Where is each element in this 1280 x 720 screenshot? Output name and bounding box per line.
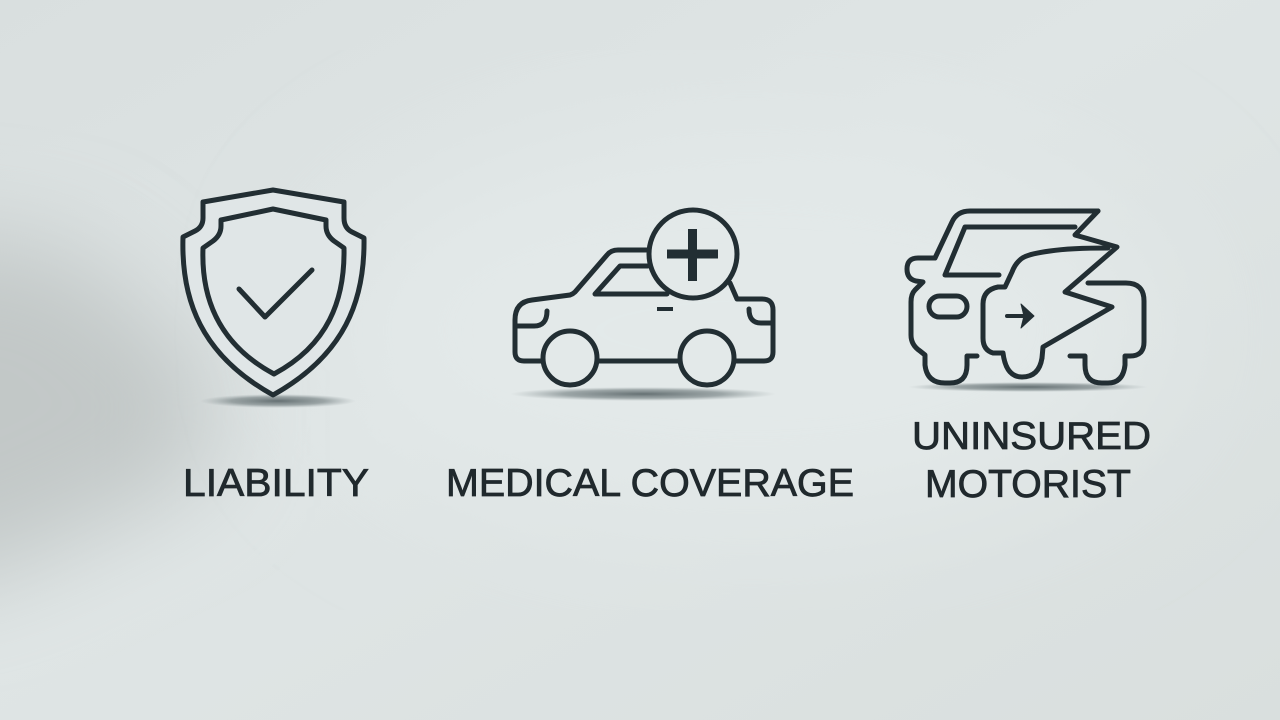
direction arrow (1007, 304, 1034, 328)
icon: liability shield (183, 190, 364, 408)
right car section (1070, 283, 1144, 383)
back car lamp (929, 296, 967, 317)
front car outline (983, 248, 1108, 377)
front wheel (543, 331, 597, 385)
car window (595, 266, 667, 294)
back car outline (907, 211, 1098, 383)
label: uninsured motorist: UNINSURED (912, 415, 1151, 458)
shield inner outline (203, 209, 344, 374)
back car window (945, 227, 1075, 275)
shield outer outline (183, 190, 364, 395)
plus badge (649, 210, 737, 298)
car body (515, 250, 773, 361)
collision zigzag (1042, 211, 1117, 358)
door handle (657, 307, 673, 311)
icon: colliding cars (907, 211, 1148, 392)
headlight (517, 311, 547, 326)
car shadow (510, 387, 776, 401)
check mark (239, 270, 312, 317)
collision shadow (908, 382, 1148, 392)
rear wheel (680, 331, 734, 385)
plus sign (667, 229, 718, 281)
label: uninsured motorist (912, 415, 1151, 506)
label: uninsured motorist: MOTORIST (925, 463, 1131, 506)
label: liability: LIABILITY (183, 462, 369, 505)
label: medical coverage: MEDICAL COVERAGE (446, 462, 854, 505)
shield shadow (200, 394, 356, 408)
icon: car with medical plus (510, 210, 776, 401)
tail light (749, 309, 772, 323)
